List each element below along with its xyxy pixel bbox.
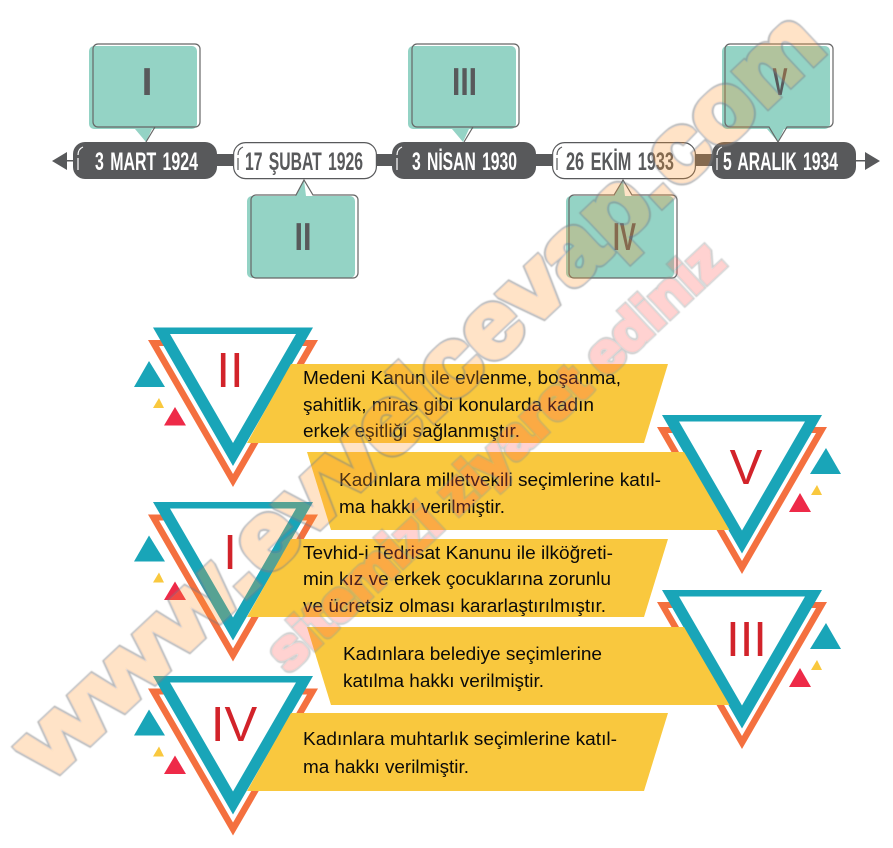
callout: IV: IV: [613, 216, 636, 259]
date pill: 3 Mart 1924: 3 MART 1924: [95, 148, 198, 176]
date pill: 3 Nisan 1930: [392, 142, 536, 179]
text band: muhtarlık seçimleri: [247, 713, 668, 791]
badge: I: [134, 502, 318, 662]
text band: Tevhid-i Tedrisat: ve ücretsiz olması kararlaştırılmıştır.: [303, 596, 606, 616]
date pill: 26 Ekim 1933: 26 EKİM 1933: [566, 148, 674, 176]
badge: II: II: [216, 344, 244, 398]
text band: Tevhid-i Tedrisat: [247, 539, 668, 617]
callout: IV: [566, 180, 677, 278]
callout: V: V: [772, 61, 788, 104]
watermark: site address: www.: [0, 520, 278, 797]
callout: III: [408, 44, 519, 142]
badge: V: V: [730, 441, 763, 495]
text band: Medeni Kanun: erkek eşitliği sağlanmıştır.: [303, 421, 520, 441]
callout: II: II: [294, 216, 312, 259]
date pill: 5 Aralık 1934: [712, 142, 856, 179]
arrow: left: [52, 152, 74, 170]
text band: milletvekili seçimleri: ma hakkı verilmiştir.: [339, 497, 505, 517]
badge: III: [657, 590, 841, 749]
text band: Medeni Kanun: şahitlik, miras gibi konularda kadın: [303, 395, 594, 415]
badge: II: [134, 328, 318, 487]
badge: III: III: [726, 613, 767, 667]
callout: I: I: [142, 61, 152, 104]
text band: belediye seçimleri: katılma hakkı verilmiştir.: [343, 671, 544, 691]
timeline: [52, 44, 880, 278]
timeline connectors: [215, 154, 714, 166]
text band: Medeni Kanun: [247, 364, 668, 443]
callout: V: [722, 44, 833, 142]
date pill: 26 Ekim 1933: [553, 143, 695, 179]
callout: III: III: [452, 61, 477, 104]
arrow: right: [855, 152, 880, 170]
text band: Tevhid-i Tedrisat: min kız ve erkek çocuklarına zorunlu: [303, 569, 611, 589]
badge: IV: IV: [211, 698, 257, 752]
text band: milletvekili seçimleri: Kadınlara milletvekili seçimlerine katıl-: [339, 470, 661, 490]
watermark: site address: evvelcevap.com: [209, 0, 842, 593]
text band: Tevhid-i Tedrisat: Tevhid-i Tedrisat Kanunu ile ilköğreti-: [303, 543, 613, 563]
text band: belediye seçimleri: Kadınlara belediye seçimlerine: [343, 644, 602, 664]
date pill: 3 Nisan 1930: 3 NİSAN 1930: [412, 148, 517, 176]
text band: belediye seçimleri: [307, 627, 730, 705]
text band: muhtarlık seçimleri: ma hakkı verilmiştir.: [303, 757, 469, 777]
badge: V: [657, 415, 841, 574]
callout: I: [89, 44, 200, 142]
date pill: 17 Şubat 1926: [234, 143, 376, 179]
text band: milletvekili seçimleri: [307, 452, 730, 530]
text band: Medeni Kanun: Medeni Kanun ile evlenme, boşanma,: [303, 368, 621, 388]
text band: muhtarlık seçimleri: Kadınlara muhtarlık seçimlerine katıl-: [303, 729, 617, 749]
date pill: 3 Mart 1924: [73, 142, 217, 179]
badge: I: I: [223, 526, 237, 580]
date pill: 17 Şubat 1926: 17 ŞUBAT 1926: [245, 148, 363, 176]
watermark: invitation: sitemizi ziyaret ediniz: [254, 228, 735, 683]
callout: II: [247, 180, 358, 278]
badge: IV: [134, 676, 318, 836]
